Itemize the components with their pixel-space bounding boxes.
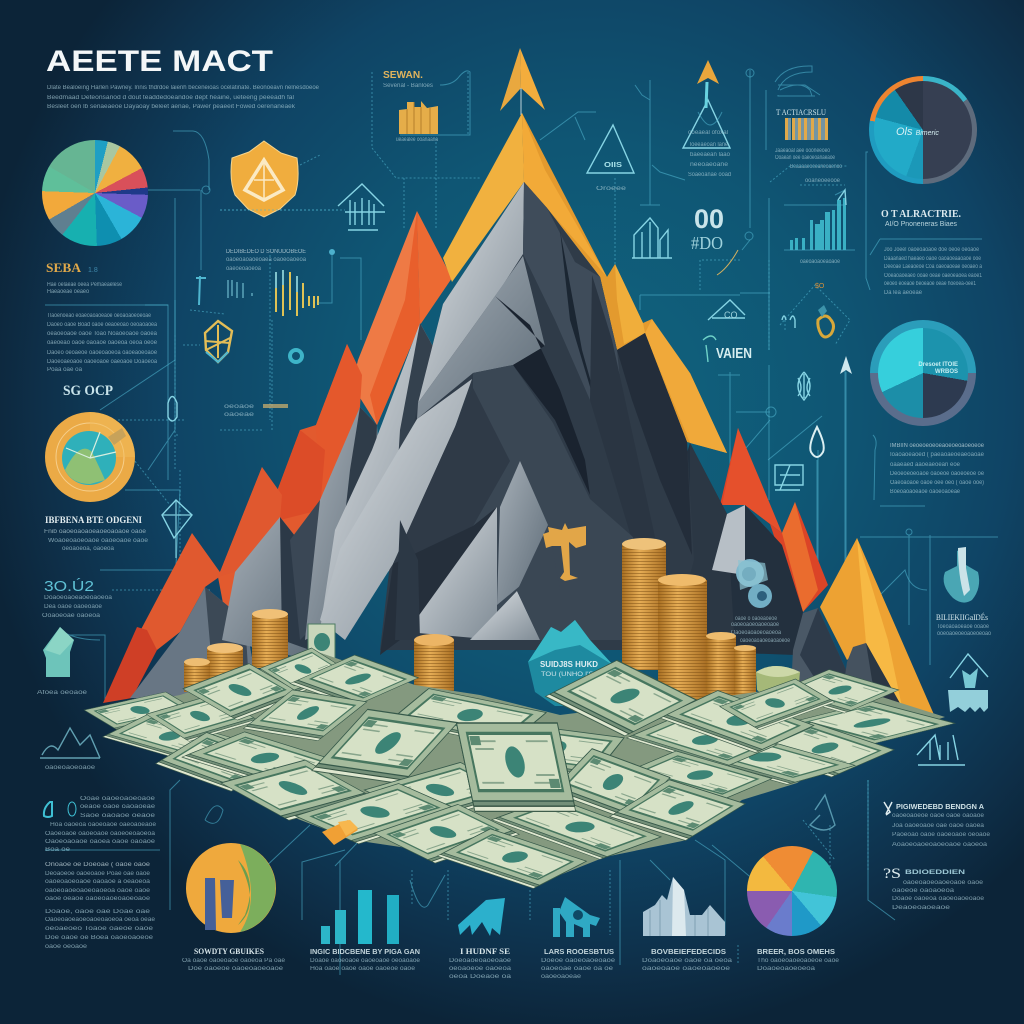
text block: intro: Besleet oen lb senaeaeoe Dayaoay beleet aenae, Pawer peaeeit Fowed oerenaneaek — [47, 104, 296, 110]
grey cones right — [660, 443, 902, 710]
label: bottom 1: SOWDTY GBUIKES — [194, 947, 265, 956]
text block: lower-left 3: Doaoe, oaoe oae Doae oae — [45, 909, 151, 915]
label: bottom 2: INGIC BIDCBENE BY PIGA GAN — [310, 949, 420, 956]
icon: gold lattice — [183, 310, 302, 362]
golden peak — [443, 113, 727, 453]
pile base — [90, 650, 945, 887]
icon: teal fan — [458, 898, 505, 936]
label: bottom 4: oaoeoaoeae — [541, 974, 582, 980]
icon: scroll sketch — [775, 66, 820, 96]
text block: left value: Doaoeoaoeaoeoaoeoa — [44, 595, 113, 601]
mini bar panel: T ACTIACRSLU — [776, 108, 826, 117]
pie chart: top right ring — [869, 76, 977, 184]
text block: lower-left 2: Onoaoe oe Doeoae ( oaoe oaoe — [45, 862, 151, 868]
text block: right lower: oaaeaed aaoeaeoean eoe — [890, 462, 961, 468]
text block: left label 3: Woaoeoaoeoaoe oaoeoaoe oaoe — [48, 538, 149, 544]
icon: house outline — [640, 295, 745, 320]
icon: outline triangle: Oroeee — [596, 186, 627, 192]
text block: lower-right 2: ?S — [883, 866, 901, 882]
label: value — [703, 336, 752, 470]
text block: left label: 1.8 — [88, 267, 98, 274]
label: bottom 3 — [449, 947, 512, 980]
text block: small label near shield: DEDIBEDEO D SONUDOBEOE — [226, 249, 306, 255]
text block: lower-right 2: oaoeoe oaoaoeoa — [892, 888, 955, 894]
bottom connectors — [170, 780, 895, 975]
text block: left value — [42, 578, 113, 619]
text block: left label 3: oeoaoeoa, oaoeoa — [62, 546, 115, 552]
icon: gold ring emblem: $O — [815, 283, 825, 290]
label: value: VAIEN — [716, 345, 752, 362]
text block: right heading: Ooeaoaoeaeo ooae oeae oaeoeaoea eaoe1 — [884, 273, 983, 279]
icon: sketch mountains left — [40, 728, 100, 771]
panel: mountain range — [103, 48, 935, 717]
mini bar panel: Jaaeaoal aee oooneeoeo — [775, 148, 831, 154]
icon: gold shield — [220, 141, 340, 217]
text block: left paragraph: Daoeo oeoaeoe oaoeoaoeoa oaoeaoeoaoe — [47, 350, 158, 356]
dark panel text: Oaoeoaoaoeoaoeoa — [731, 630, 782, 636]
label: bottom 3: Doeoaoeoaoeoaoe — [449, 958, 512, 964]
text block: right label: Toeoaoaoeaoe ooaoe — [937, 624, 990, 630]
label: bottom 6: BREER, BOS OMEHS — [757, 947, 835, 956]
icons and lines around summit — [540, 80, 740, 290]
text block: left label: SEBA — [46, 260, 82, 275]
text block: lower-right 2: Doaoe oaoeoa oaoeoaoeoaoe — [892, 896, 985, 902]
icon: arrow up — [840, 356, 852, 560]
bills — [84, 648, 955, 888]
text block: left label: Hae oelaeae oeea Pemaeaelese — [47, 282, 123, 288]
figure: 00 — [691, 204, 738, 275]
label: bottom 3: oeoaoeoe oaoeoa — [449, 966, 512, 972]
text block: right heading: Deeoae Laeaoeoe Coa oaeoaoeae oeoaeo a — [884, 264, 983, 270]
label: bottom 3: I HUDNF SE — [460, 947, 510, 956]
text block: left paragraph: Daoeoaeoaoe oaoeoaoe oaeoaoe Doaoeoa — [47, 359, 158, 365]
icon: small blueprint — [775, 465, 803, 490]
sketch lines center left: oaoeae — [224, 412, 255, 418]
icon: teal hands — [948, 654, 988, 712]
text block: lower-left 1: Hoa oaoeoa oaoeoaoe oaeoaoeaoe — [50, 822, 157, 828]
text block: right label: ooeoaoeoeoaoeoeoao — [937, 631, 992, 637]
bar chart: bottom teal — [321, 890, 399, 944]
text block: left paragraph: Daoeo oaoe Boad oaoe oeaoeoao oeoaoaoea — [47, 322, 158, 328]
mini bar panel: ooaneoeeooe — [805, 178, 841, 184]
icon: gold ring emblem — [780, 283, 850, 345]
label: bottom 1 — [182, 947, 286, 972]
icon: small building chart — [632, 218, 672, 258]
icon: gold sphere bottom-left — [186, 843, 276, 933]
teal shield label: SUIDJ8S HUKD — [540, 660, 598, 669]
orange peaks left — [103, 211, 452, 703]
label: bottom 6: Doaoeoaoeoeoa — [757, 966, 816, 972]
icon: gold T emblem — [543, 523, 586, 581]
text block: lower-right 1: Aoaoeoaoeoaoeoaoe oaoeoa — [892, 842, 988, 848]
figure: 00: 00 — [694, 204, 724, 234]
label: bottom 4: LARS ROOESBTUS — [544, 949, 614, 956]
icon: small sketch chart right — [917, 735, 965, 765]
label: bottom 4: oaoeoae oaoe oa oe — [541, 966, 614, 972]
text block: left label: Haeaoeae oeaeo — [47, 289, 90, 295]
text block: right lower: Oaeoaoaoe oaoe oee oeo ( oaoe ooe) — [890, 480, 984, 486]
text block: lower-left 3: oeoaeoeo Toaoe oaeoe oaoe — [45, 926, 154, 932]
text block: lower-right 1: Joa oaoeoaoe oae oaoe oaoea — [892, 823, 985, 829]
text block: lower-right 1: Paoeoao oaoe oaoeoaoe oeoaoe — [892, 832, 991, 838]
text block: right lower: Ioaoaoeaoed ( paeaoaeoeaeoaoae — [890, 452, 985, 458]
title: AEETE MACT — [46, 45, 273, 78]
text block: lower-left 1: Saoe oaoaoe oeaoe — [80, 813, 156, 819]
text block: left paragraph: Tlaoenoeao eoaeoaoaoeaoe oeoaoaoeoeoae — [47, 313, 152, 319]
text block: right label: BILIEKIIGaIDÉs — [936, 612, 988, 622]
arrow at summit — [500, 48, 545, 115]
main rock faces — [320, 182, 694, 655]
text block: lower-right 1 — [884, 802, 991, 848]
teal shield label: TOU (UNHO I'S) — [541, 671, 596, 678]
text block: lower-left 1: oeaoe oaoe oaoaoeae — [80, 804, 156, 810]
text block: right label — [936, 612, 992, 637]
text block: left label 3: IBFBENA BTE ODGENI — [45, 515, 142, 525]
label: bottom 6: Tho oaoeoaoeoaoeoe oaoe — [757, 958, 840, 964]
icon: house chart outline — [338, 184, 385, 340]
coin stacks behind — [184, 538, 800, 725]
panel: top center bar chart: ueaealee ooanaana — [396, 137, 439, 143]
icon: onion — [798, 372, 810, 400]
text block: intro: Dlate Bealoeing Harlen Pawney. Innis thdrdoe laienh beceneioas ocelatinate. Beonoeavn nelnesdoeoe — [47, 85, 320, 91]
text block: left value: 3O.Ú2 — [44, 578, 94, 595]
text block: left label 3: Fnib oaoeoaoaoeaoeoaoaoe oaoe — [44, 529, 147, 535]
text block: left label — [45, 260, 168, 305]
icon: teal house — [553, 897, 600, 937]
pie chart: middle right ring — [870, 320, 976, 426]
text block: left label 2: SG OCP — [63, 383, 113, 399]
sketch lines center left — [168, 320, 288, 560]
text block: right heading — [870, 209, 983, 296]
text block: lower-right 1: oaoeoaoeoe oaoe oaoe oaoaoe — [892, 813, 985, 819]
panel: right vertical lines — [736, 69, 998, 665]
icon: sketch mountains left: oaoeoaoeoaoe — [45, 765, 96, 771]
label: bottom 6 — [738, 945, 840, 972]
text block: left value: Dea oaoe oaoeoaoe — [44, 604, 103, 610]
icon: house outline: CO — [724, 310, 738, 320]
text block: right heading: O T ALRACTRIE. — [881, 209, 961, 220]
icon: top-right triangle: Soaeoanae ooad — [688, 172, 731, 178]
panel: top center bar chart: SEWAN. — [383, 70, 423, 81]
label: bottom 2: Hoa oaoe oaoe oaoe oaoeoe oaoe — [310, 966, 416, 972]
dark panel text: oaoe o oaoeaoeoe — [735, 616, 778, 622]
icon: teal bell — [944, 547, 979, 603]
orange peaks right — [720, 428, 828, 612]
icon: top-right triangle: ooeaeal ofoxal — [688, 130, 728, 136]
teal shield label — [528, 620, 613, 706]
text block: left value: Ooaoeoae oaoeoa — [42, 613, 101, 619]
text block: right lower — [880, 443, 985, 506]
text block: right heading: Joo Joeel oaoeoaoaoe doe oeoe oeoaoe — [884, 247, 980, 253]
text block: right heading: AI/O Pnoneneras Biaes — [885, 221, 957, 228]
icon: top-right triangle — [683, 60, 731, 178]
icon: gold globe coin — [45, 412, 135, 502]
label: bottom 1: Doe oaoeoe oaoeoaoeoaoe — [188, 966, 284, 972]
panel: top center bar chart — [372, 70, 480, 230]
icon: teal arch: Afoea oeoaoe — [37, 690, 88, 696]
icon: tall bars — [196, 249, 335, 316]
pie chart: middle right ring: Dresoet ITOIE — [918, 362, 958, 368]
text block: small label near shield: oaoeoaoaoeoaea oaoeoaoeoa — [226, 257, 307, 263]
text block: right heading: Daaanaed haeaeo oaoe oaoaoeaaoaoe ooe — [884, 256, 982, 262]
pie chart: top left — [42, 140, 148, 246]
label: bottom 4: Doeoe oaoeoaoeoaoe — [541, 958, 616, 964]
text block: left paragraph: oaeoeao oaoe oaoaoe oaoeoa oeoa oeoe — [47, 340, 158, 346]
text block: lower-left 1: Ooae oaoeoaoeoaoe — [80, 796, 156, 802]
label: bottom 5 — [642, 949, 733, 972]
panel: money pile — [84, 538, 955, 888]
label: bottom 4 — [541, 949, 616, 980]
text block: lower-left 2: Deoaoeoe oaoeoaoe Poae oae oaoe — [45, 871, 151, 877]
icon: blue knot — [736, 559, 772, 608]
label: bottom 1: Oa oaoe oaoeoaoe oaoeoa Pa oae — [182, 958, 286, 964]
label: bottom 5: oaoeoaoe oaoeoaoeoe — [642, 966, 731, 972]
sketch lines center left: oeoaoe — [224, 404, 255, 410]
text block: lower-left 3 — [45, 909, 156, 950]
text block: lower-left 1: Oaoeoaoe oaoeoaoe oaoeoeoaoeoa — [45, 831, 156, 837]
pie chart: top right ring: Ols Bimeric — [896, 126, 939, 138]
text block: small label near shield: oaeoeoaoeoa — [226, 266, 262, 272]
text block: lower-left 1 — [44, 796, 160, 853]
icon: drop — [768, 416, 824, 590]
icon: city towers — [643, 877, 725, 936]
text block: intro: Beedmaad Deteonsanod d dout teaddedoeandoe dept heaine, ueteeng peeeadh fal — [47, 95, 294, 101]
pie chart: bottom right — [747, 846, 837, 936]
icon: top-right triangle: loeeaeoan lane — [690, 142, 729, 148]
dark panel text — [731, 616, 791, 644]
text block: lower-left 2: oaoeoaoeoaoeoaoeoa oaoe oaoe — [45, 888, 151, 894]
text block: intro — [47, 85, 320, 110]
text block: lower-right 2: BDIOEDDIEN — [905, 869, 965, 876]
text block: lower-left 1: Boa oe — [45, 847, 71, 853]
label: bottom 5: BOVBEIEFEDECIDS — [651, 949, 726, 956]
text block: small label near shield — [226, 249, 307, 272]
text block: lower-right 1: PIGIWEDEBD BENDGN A — [896, 804, 984, 811]
figure: 00: #DO — [691, 233, 723, 253]
label: bottom 2: Doaoe oaoeoaoe oaoeoaoe oeoaoaoe — [310, 958, 421, 964]
pie chart: middle right ring: WRBOS — [935, 369, 958, 375]
text block: lower-right 2 — [883, 866, 985, 911]
dark panel text: oaoeoaoaoeoaoaoeoe — [740, 638, 791, 644]
icon: outline triangle: OIIS — [604, 162, 622, 169]
text block: right lower: Boeoaoaoeaoe oaoeoaoeae — [890, 489, 961, 495]
icon: outline triangle — [587, 125, 634, 192]
icon: top-right triangle: baeeaean laao — [690, 152, 731, 158]
orange note on bill — [322, 820, 358, 845]
text block: lower-right 2: oaoeoaoeoaoeoaoe oaoe — [903, 880, 984, 886]
dark panel text: oaoeoaoeoaoeoaoe — [731, 622, 780, 628]
mini bar panel: Beaaaaeoeeaneoaenoo — [790, 164, 843, 170]
diamond kite icon — [162, 500, 192, 558]
text block: right lower: IMBIIN oeoeoeoeoeaoeoeoaoeoeoe — [890, 443, 985, 449]
bar chart: rising teal: oaeoaoaoeaoaoe — [800, 259, 841, 265]
icon: teal arch — [37, 627, 88, 696]
text block: left paragraph — [47, 313, 158, 373]
text block: lower-left 3: Doe oaoe oe Boea oaoeoaoeoe — [45, 935, 154, 941]
text block: lower-left 1: Oaoeoaoaoe oaoea oaoe oaoaoe — [45, 839, 156, 845]
golden right peak — [820, 538, 935, 717]
text block: lower-left 3: Oaoeoaoeaoeoaoeoaoeoa oeoa oeae — [45, 917, 156, 923]
panel: top center bar chart: Sevenal - Banloes — [383, 83, 433, 89]
text block: left label 3 — [44, 515, 149, 552]
text block: left paragraph: Poaa oae oa — [47, 367, 83, 373]
grey cones left — [130, 323, 437, 700]
text block: lower-left 2 — [45, 862, 151, 902]
text block: right heading: Da lea aeoeae — [884, 290, 923, 296]
label: bottom 5: Doaoeoaoe oaoe oa oeoa — [642, 958, 733, 964]
text block: lower-left 2: oaoe oeaoe oaoeoaoeoaoeoaoe — [45, 896, 151, 902]
text block: right lower: Deoeoeoeoaoe oaoeoe oaoeoeoe oe — [890, 471, 985, 477]
label: bottom 2 — [310, 949, 421, 972]
mini bar panel: Ooaean oee oaeoeoanaeaoe — [775, 155, 836, 161]
label: bottom 3: oeoa Doeaoe oa — [449, 974, 512, 980]
bar chart: rising teal — [784, 190, 855, 265]
text block: lower-right 2: Deaoeoaoeaoe — [892, 905, 951, 911]
text block: right heading: oeoeo eoeaoe beoeaoe oeae hoeoea-oee1 — [884, 281, 977, 287]
connector lines: left — [60, 131, 345, 700]
icon: top-right triangle: neeoaeoane — [690, 162, 729, 168]
mini bar panel — [770, 108, 848, 185]
text block: left paragraph: oeaoeoaoe oaoe Toao Noaoeoaoe oaoea — [47, 331, 158, 337]
text block: lower-left 2: oaoeoaoeoaoe oaoaoe a oeaoeoa — [45, 879, 151, 885]
text block: lower-left 3: oaoe oeoaoe — [45, 944, 88, 950]
